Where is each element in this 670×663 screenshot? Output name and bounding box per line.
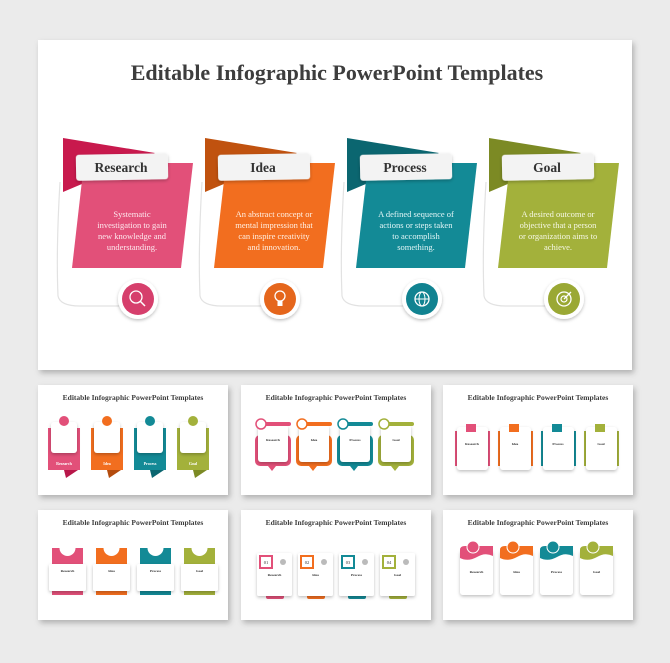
panel: main slide: [38, 40, 632, 370]
thumbnail 1: Process: [144, 461, 157, 466]
card: Research: investigation to gain: [97, 220, 167, 230]
thumbnail 3: Goal: [597, 442, 605, 446]
card: Goal: [483, 138, 619, 319]
card: Idea: and innovation.: [248, 242, 300, 252]
thumbnail 5: Goal: [394, 573, 401, 577]
thumbnail 3: Editable Infographic PowerPoint Templates: [468, 393, 608, 402]
thumbnail 4: Process: [150, 569, 162, 573]
thumbnail 5: Process: [351, 573, 363, 577]
thumbnail 1: [38, 385, 228, 495]
card: Process: something.: [397, 242, 435, 252]
card: Research: [57, 138, 193, 319]
thumbnail 1: Idea: [103, 461, 111, 466]
thumbnail 5: 03: [346, 560, 351, 565]
thumbnail 1: Editable Infographic PowerPoint Templates: [63, 393, 203, 402]
thumbnail 5: 02: [305, 560, 309, 565]
card: Goal: A desired outcome or: [522, 209, 595, 219]
thumbnail 5: 01: [264, 560, 268, 565]
thumbnail 1: Goal: [189, 461, 198, 466]
card: Goal: or organization aims to: [519, 231, 597, 241]
thumbnail 2: Editable Infographic PowerPoint Templates: [266, 393, 406, 402]
card: Idea: mental impression that: [235, 220, 313, 230]
thumbnail 1: Research: [56, 461, 73, 466]
title: Editable Infographic PowerPoint Templates: [131, 60, 544, 85]
thumbnail 5: Idea: [312, 573, 319, 577]
thumbnail 6: Idea: [513, 570, 520, 574]
thumbnail 5: Editable Infographic PowerPoint Templates: [266, 518, 406, 527]
thumbnail 2: Goal: [392, 438, 400, 442]
card: Process: to accomplish: [392, 231, 440, 241]
thumbnail 2: Process: [349, 438, 361, 442]
icon: globe: [402, 279, 442, 319]
thumbnail 3: Process: [552, 442, 564, 446]
thumbnail 4: Goal: [196, 569, 203, 573]
card: Process: Process: [383, 160, 427, 175]
thumbnail 4: Research: [61, 569, 74, 573]
thumbnail 5: [241, 510, 431, 620]
card: Research: understanding.: [107, 242, 157, 252]
card: Goal: achieve.: [544, 242, 572, 252]
thumbnail 6: Process: [551, 570, 563, 574]
thumbnail 6: Goal: [593, 570, 600, 574]
thumbnail 4: Editable Infographic PowerPoint Templates: [63, 518, 203, 527]
card: Process: A defined sequence of: [378, 209, 454, 219]
icon: bulb: [260, 279, 300, 319]
thumbnail 5: 04: [387, 560, 392, 565]
card: Research: Research: [94, 160, 148, 175]
card: Process: actions or steps taken: [380, 220, 453, 230]
card: Goal: objective that a person: [520, 220, 597, 230]
card: Goal: Goal: [533, 160, 561, 175]
thumbnail 4: Idea: [108, 569, 115, 573]
thumbnail 3: [443, 385, 633, 495]
card: Process: [341, 138, 477, 319]
icon: research magnifier: [118, 279, 158, 319]
thumbnail 3: Research: [465, 442, 479, 446]
card: Idea: An abstract concept or: [236, 209, 313, 219]
card: Idea: can inspire creativity: [238, 231, 310, 241]
thumbnail 2: [241, 385, 431, 495]
thumbnail 2: Idea: [311, 438, 318, 442]
thumbnail 6: Research: [470, 570, 483, 574]
card: Idea: Idea: [250, 160, 276, 175]
thumbnail 6: [443, 510, 633, 620]
card: Idea: [199, 138, 335, 319]
thumbnail 5: Research: [268, 573, 281, 577]
thumbnail 3: Idea: [512, 442, 519, 446]
card: Research: Systematic: [113, 209, 151, 219]
card: Research: new knowledge and: [98, 231, 167, 241]
icon: target: [544, 279, 584, 319]
thumbnail 6: Editable Infographic PowerPoint Templates: [468, 518, 608, 527]
thumbnail 2: Research: [266, 438, 280, 442]
thumbnail 4: [38, 510, 228, 620]
